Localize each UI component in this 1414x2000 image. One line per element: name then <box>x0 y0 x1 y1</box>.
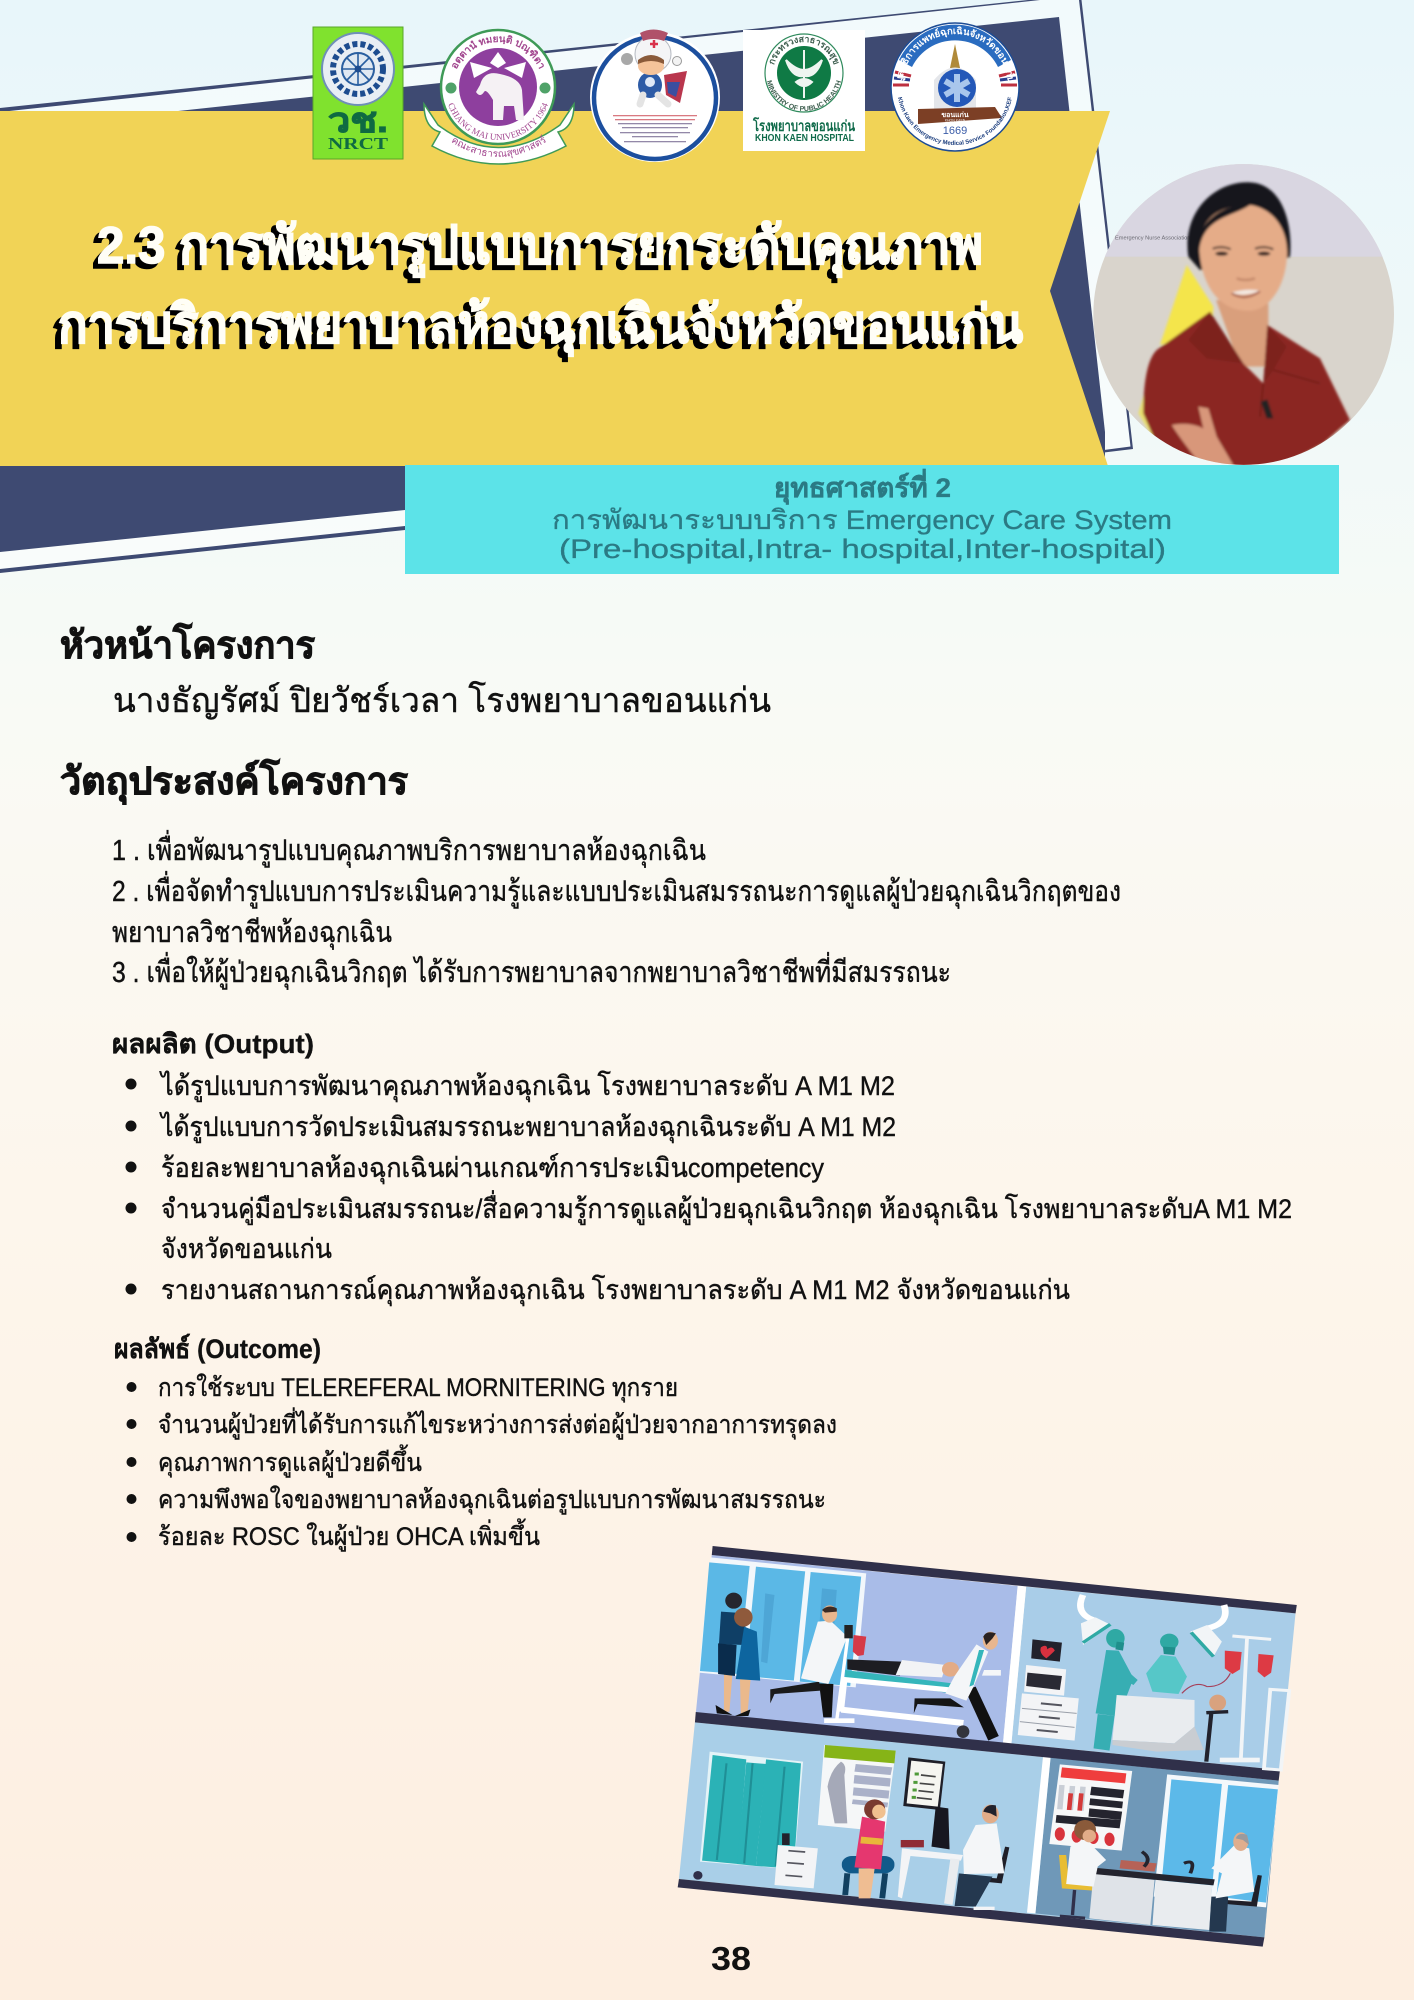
title: 2.3 การพัฒนารูปแบบการยกระดับคุณภาพ <box>97 217 983 278</box>
title: การบริการพยาบาลห้องฉุกเฉินจังหวัดขอนแก่น <box>52 301 1017 362</box>
output list: รายงานสถานการณ์คุณภาพห้องฉุกเฉิน โรงพยาบาลระดับ A M1 M2 จังหวัดขอนแก่น <box>161 1274 1070 1307</box>
title: การบริการพยาบาลห้องฉุกเฉินจังหวัดขอนแก่น <box>58 296 1023 357</box>
logo: Chiang Mai University <box>423 28 575 165</box>
output list: ได้รูปแบบการวัดประเมินสมรรถนะพยาบาลห้องฉุกเฉินระดับ A M1 M2 <box>159 1112 896 1144</box>
strategy box <box>405 465 1339 574</box>
running doctor right <box>914 1632 1001 1741</box>
objectives list: 1 . เพื่อพัฒนารูปแบบคุณภาพบริการพยาบาลห้องฉุกเฉิน <box>112 830 706 868</box>
title <box>52 217 1023 362</box>
portrait photo: Emergency Nurse Association of <box>1115 235 1197 241</box>
objectives list <box>112 830 1121 990</box>
strategy box: ยุทธศาสตร์ที่ 2 <box>774 468 951 505</box>
outcome list: ร้อยละ ROSC ในผู้ป่วย OHCA เพิ่มขึ้น <box>158 1518 540 1552</box>
outcome list: การใช้ระบบ TELEREFERAL MORNITERING ทุกราย <box>158 1373 678 1403</box>
output list: จังหวัดขอนแก่น <box>161 1234 332 1264</box>
running doctor left <box>770 1605 866 1723</box>
doctor at desk <box>898 1805 1009 1910</box>
title: 2.3 การพัฒนารูปแบบการยกระดับคุณภาพ <box>92 222 978 283</box>
strategy box: การพัฒนาระบบบริการ Emergency Care System <box>552 505 1172 535</box>
output heading: ผลผลิต (Output) <box>112 1029 314 1059</box>
logo: Chiang Mai University: CHIANG MAI UNIVERSITY 1964 <box>448 103 548 140</box>
anatomy poster and clipboard <box>818 1745 945 1832</box>
logo: Khon Kaen EMS foundation: มูลนิธิการแพทย์ฉุกเฉินจังหวัดขอนแก่น <box>897 26 1014 81</box>
objectives list: 2 . เพื่อจัดทำรูปแบบการประเมินความรู้และแบบประเมินสมรรถนะการดูแลผู้ป่วยฉุกเฉินวิกฤตของ <box>112 871 1121 909</box>
outcome list: คุณภาพการดูแลผู้ป่วยดีขึ้น <box>158 1444 422 1478</box>
output list <box>126 1071 1292 1307</box>
strategy box: (Pre-hospital,Intra- hospital,Inter-hospital) <box>559 534 1166 564</box>
logo: Khon Kaen Hospital <box>743 30 865 151</box>
logo: NRCT <box>313 27 403 159</box>
logo: mascot seal <box>590 30 720 162</box>
logo: Chiang Mai University: อตฺตานํ ทมยนฺติ ปณฺฑิตา <box>452 35 544 69</box>
page number: 38 <box>711 1940 751 1977</box>
output list: ร้อยละพยาบาลห้องฉุกเฉินผ่านเกณฑ์การประเมินcompetency <box>161 1152 824 1185</box>
operating team <box>1080 1595 1289 1770</box>
seated patient <box>842 1799 894 1898</box>
logo: NRCT: วช. <box>328 102 388 140</box>
heading: objectives: วัตถุประสงค์โครงการ <box>60 758 409 805</box>
heading: project lead: หัวหน้าโครงการ <box>60 622 316 667</box>
objectives list: 3 . เพื่อให้ผู้ป่วยฉุกเฉินวิกฤต ได้รับการพยาบาลจากพยาบาลวิชาชีพที่มีสมรรถนะ <box>112 952 951 990</box>
logo: NRCT: NRCT <box>328 134 389 153</box>
logo: Khon Kaen EMS foundation: Khon Kaen Emergency Medical Service Foundation,KEF <box>898 96 1012 145</box>
lab room <box>1049 1764 1279 1932</box>
output list: จำนวนคู่มือประเมินสมรรถนะ/สื่อความรู้การดูแลผู้ป่วยฉุกเฉินวิกฤต ห้องฉุกเฉิน โรงพยาบาลระดับA M1 M2 <box>161 1190 1292 1226</box>
logo: Khon Kaen EMS foundation: 1669 <box>943 125 967 137</box>
logo: Khon Kaen Hospital: MINISTRY OF PUBLIC HEALTH <box>766 80 841 111</box>
embracing couple <box>716 1593 760 1716</box>
logo: Khon Kaen EMS foundation <box>890 22 1020 152</box>
objectives list: พยาบาลวิชาชีพห้องฉุกเฉิน <box>112 917 392 950</box>
portrait photo <box>1090 160 1400 472</box>
logo: Khon Kaen Hospital: โรงพยาบาลขอนแก่น <box>752 116 856 135</box>
logo: Khon Kaen EMS foundation: ขอนแก่น <box>941 111 969 119</box>
outcome list: จำนวนผู้ป่วยที่ได้รับการแก้ไขระหว่างการส่งต่อผู้ป่วยจากอาการทรุดลง <box>158 1407 837 1440</box>
logo: Chiang Mai University: คณะสาธารณสุขศาสตร์ <box>452 134 546 158</box>
logo: Khon Kaen Hospital: KHON KAEN HOSPITAL <box>755 133 854 144</box>
logo: Khon Kaen EMS foundation: KHON KAEN <box>945 118 966 122</box>
patient monitor and cart <box>1018 1639 1079 1741</box>
outcome heading: ผลลัพธ์ (Outcome) <box>114 1333 321 1364</box>
header graphic: diagonal frame, navy panels and yellow banner <box>0 0 1133 573</box>
output list: ได้รูปแบบการพัฒนาคุณภาพห้องฉุกเฉิน โรงพยาบาลระดับ A M1 M2 <box>159 1071 895 1103</box>
outcome list <box>126 1373 837 1552</box>
outcome list: ความพึงพอใจของพยาบาลห้องฉุกเฉินต่อรูปแบบการพัฒนาสมรรถนะ <box>158 1485 826 1515</box>
curtain and drawers <box>693 1752 818 1888</box>
stretcher with patient <box>839 1659 969 1738</box>
logo: Khon Kaen Hospital: กระทรวงสาธารณสุข <box>770 36 839 65</box>
project lead name: นางธัญรัศม์ ปิยวัชร์เวลา โรงพยาบาลขอนแก่น <box>113 681 771 720</box>
hospital illustration <box>678 1546 1297 1947</box>
